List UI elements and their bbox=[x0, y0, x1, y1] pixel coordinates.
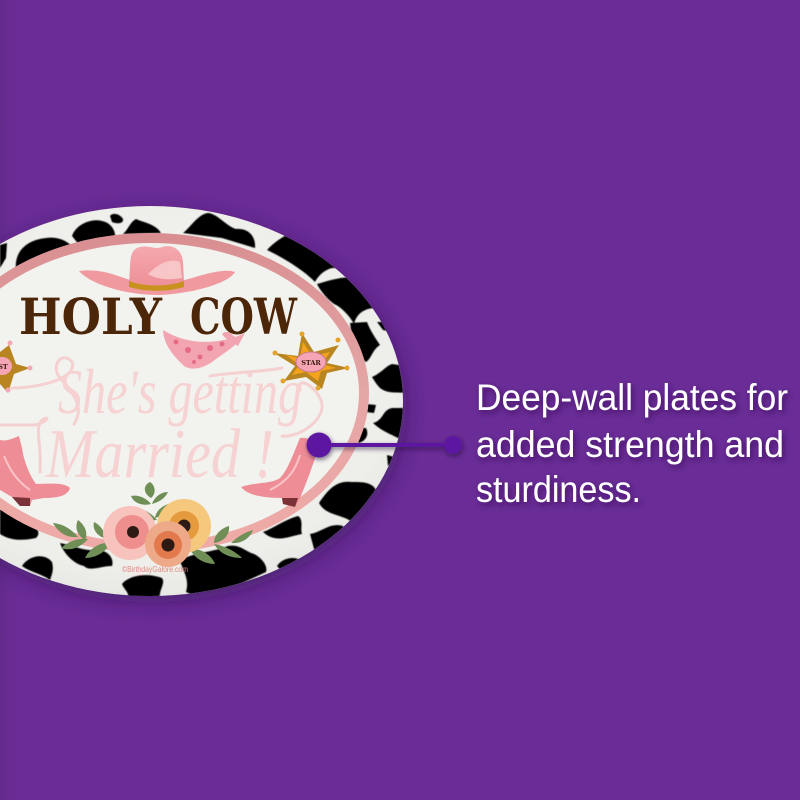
married text: Married ! bbox=[45, 416, 274, 493]
copyright mark: ©BirthdayGalore.com bbox=[122, 564, 188, 574]
callout text: added strength and bbox=[476, 424, 784, 465]
sheriff star right bbox=[272, 332, 350, 390]
leader line bbox=[319, 443, 453, 447]
bandana bbox=[163, 330, 245, 369]
floral arrangement bbox=[53, 482, 253, 567]
callout text: sturdiness. bbox=[476, 469, 641, 510]
pink rose bbox=[103, 506, 157, 560]
sheriff star left bbox=[0, 340, 32, 393]
holy cow heading bbox=[19, 287, 298, 346]
callout connector bbox=[306, 432, 462, 458]
she's getting text: She's getting bbox=[58, 356, 302, 427]
plate base bbox=[0, 206, 403, 596]
holy cow heading: HOLY bbox=[19, 287, 163, 346]
plate anchor dot bbox=[306, 432, 332, 458]
right boot bbox=[241, 438, 317, 507]
pink ring bbox=[0, 238, 364, 548]
paper plate bbox=[0, 206, 405, 600]
leaves bbox=[53, 482, 253, 564]
peach flower bbox=[157, 499, 211, 553]
holy cow heading: COW bbox=[190, 287, 298, 346]
sheriff star right: STAR bbox=[301, 359, 321, 367]
cowboy hat bbox=[79, 246, 235, 295]
cow print rim bbox=[0, 213, 405, 600]
orange flower bbox=[145, 521, 191, 567]
callout text bbox=[476, 377, 788, 510]
left boot bbox=[0, 436, 70, 506]
rope swirls bbox=[0, 358, 322, 472]
callout text: Deep-wall plates for bbox=[476, 377, 788, 418]
text anchor dot bbox=[444, 436, 462, 454]
